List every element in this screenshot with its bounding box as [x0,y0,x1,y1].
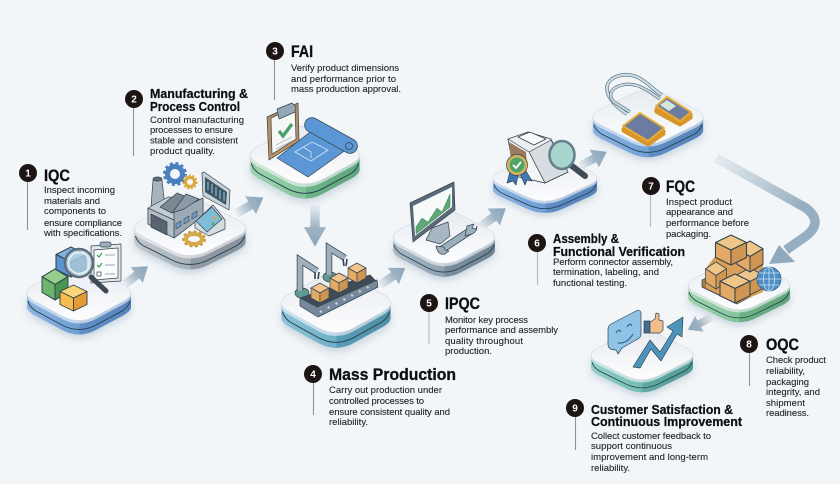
heading: Functional Verification [553,245,685,259]
description: Monitor key process [445,315,528,326]
description: packaging. [666,229,711,240]
step 1: IQC [19,164,122,239]
step 9: Customer Satisfaction and Continuous Improvement [566,399,743,474]
icon: blueprint and clipboard [267,103,352,177]
description: appearance and [666,207,733,218]
heading: FQC [666,178,695,196]
description: performance and assembly [445,325,558,336]
leader line [132,106,134,156]
heading [553,232,685,259]
description: Carry out production under [329,385,442,396]
arrow: OQC to Customer Satisfaction [684,309,716,338]
platform 2 [134,200,246,274]
step 8: OQC [740,335,826,419]
heading: OQC [766,336,799,354]
number badge: 4 [310,370,316,380]
icon: monitor and wrench [410,182,477,254]
heading: IQC [44,167,70,185]
description: ensure compliance [44,218,122,229]
arrow: IQC to Manufacturing [118,258,154,293]
description: Check product [766,355,826,366]
heading: Customer Satisfaction & [591,403,733,417]
description: controlled processes to [329,396,424,407]
heading: Process Control [150,100,240,114]
description: termination, labeling, and [553,267,659,278]
description [766,355,826,419]
step 3: FAI [266,42,401,100]
icon: palletised cartons and globe [702,235,781,304]
leader line [312,381,314,415]
description [43,185,122,239]
heading: Assembly & [553,232,619,246]
description: with specifications. [43,228,122,239]
icon: smiling speech bubble, thumb and rising arrow [608,310,683,368]
number badge: 2 [131,94,137,106]
description: ensure consistent quality and [329,407,450,418]
leader line [650,193,652,227]
number badge: 1 [25,168,31,180]
platform 8 [688,260,790,326]
description [553,257,673,289]
number badge: 3 [272,46,278,58]
heading: Manufacturing & [150,87,248,101]
description: materials and [44,196,100,207]
description: performance before [666,218,749,229]
platform 6 [493,155,597,216]
heading: Continuous Improvement [591,415,743,429]
number badge [528,234,546,252]
arrow: Assembly to FQC [575,143,612,175]
description: functional testing. [553,278,627,289]
icon: inspected connector with badge and magnifier [506,132,585,185]
description: mass production approval. [291,84,401,95]
description: shipment [766,398,805,409]
platform 5 [393,211,495,281]
description: Verify product dimensions [291,63,399,74]
description [291,63,401,95]
description: Inspect incoming [44,185,115,196]
description [666,197,749,240]
leader line [274,58,276,100]
heading: FAI [291,43,313,61]
icon: factory with gears and control console [148,164,230,246]
description [445,315,558,357]
description: components to [44,206,106,217]
step 5: IPQC [420,294,558,357]
number badge: 6 [534,238,540,250]
platform 9 [591,330,693,396]
heading [591,403,743,429]
leader line [26,180,28,230]
platform 3 [250,126,360,203]
description [591,431,711,474]
arrow: FQC to OQC [716,158,815,264]
step 7: FQC [642,177,749,240]
description: readiness. [766,408,809,419]
step 4: Mass Production [304,365,456,428]
description [329,385,450,428]
description: reliability, [766,366,805,377]
arrow: Mass Production to IPQC [374,260,411,293]
description: reliability. [329,417,368,428]
leader line [748,351,750,386]
number badge: 8 [746,340,752,350]
heading [150,87,248,114]
description: Perform connector assembly, [553,257,673,268]
leader line [536,250,538,285]
number badge: 7 [648,182,654,192]
heading: Mass Production [329,366,456,384]
arrow: Manufacturing to FAI [231,189,269,223]
icon: cable tester devices [607,75,691,145]
icon: components, magnifier and checklist [42,242,121,311]
description: Collect customer feedback to [591,431,711,442]
number badge: 5 [426,298,432,310]
step 6: Assembly and Functional Verification [528,232,685,289]
platform 4 [281,273,391,352]
description: packaging [766,377,809,388]
platform 7 [593,90,703,161]
heading: IPQC [445,295,480,313]
description: support continuous [591,441,672,452]
description: product quality. [150,146,215,157]
number badge [566,399,584,417]
description: Control manufacturing [150,115,244,126]
step 2: Manufacturing and Process Control [125,87,248,157]
description: Inspect product [666,197,732,208]
description: integrity, and [766,387,820,398]
description: stable and consistent [150,136,238,146]
icon: conveyor with robot arms [295,248,378,317]
description: processes to ensure [150,125,233,136]
leader line [574,415,576,450]
description [150,115,244,157]
arrow: IPQC to Assembly [474,200,512,235]
description: quality throughout [445,336,523,347]
description: improvement and long-term [591,452,708,463]
number badge [304,365,322,383]
description: reliability. [591,463,630,474]
description: production. [445,346,492,357]
leader line [428,310,430,344]
description: and performance prior to [291,74,396,85]
platform 1 [27,266,131,338]
number badge: 9 [572,404,578,414]
arrow: FAI to Mass Production [304,205,326,247]
